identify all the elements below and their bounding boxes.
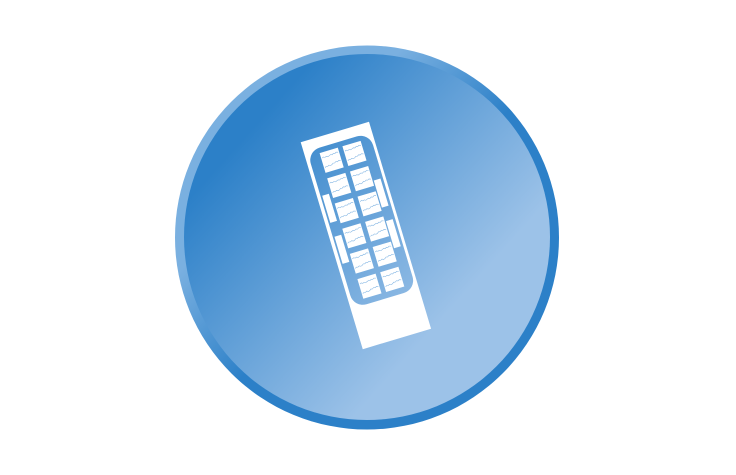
left side bars (322, 194, 349, 264)
inner disc (184, 54, 550, 420)
icon: rotated white panel (301, 122, 431, 349)
outer ring (175, 46, 559, 430)
chart cells, right column (342, 141, 404, 292)
chart cells, left column (320, 148, 382, 299)
right side bars (374, 179, 401, 248)
white sheet with rounded tray cut-out (301, 122, 431, 349)
